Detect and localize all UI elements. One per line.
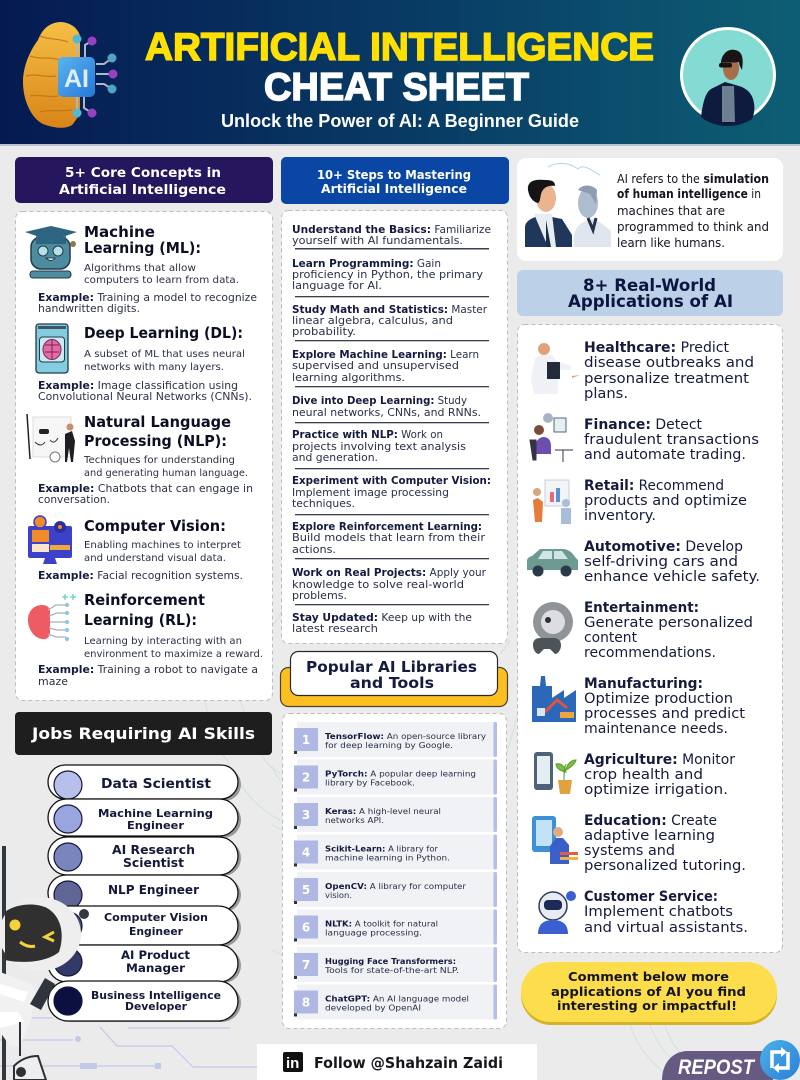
title: CHEAT SHEET	[264, 66, 529, 109]
concept: reinforcement learning: Reinforcement	[84, 591, 206, 609]
library 6	[294, 910, 497, 944]
library 3: 3	[302, 808, 310, 822]
panel: applications heading: Applications of AI	[568, 292, 733, 311]
application: education: personalized tutoring.	[584, 858, 746, 874]
application: manufacturing: processes and predict	[584, 706, 746, 722]
application: finance: fraudulent transactions	[584, 432, 759, 448]
concept: natural language processing: Processing (NLP):	[84, 432, 227, 450]
library 6: language processing.	[325, 928, 422, 938]
step 9: problems.	[292, 590, 347, 602]
step 5	[292, 395, 489, 423]
panel: libraries heading: and Tools	[350, 674, 434, 692]
job: ai product manager: Manager	[126, 961, 185, 975]
panel: applications list	[518, 324, 782, 952]
panel: core concepts heading: 5+ Core Concepts in	[65, 166, 221, 181]
icon: winking robot mascot	[0, 846, 89, 1080]
job: ai research scientist	[48, 837, 241, 876]
step 2: proficiency in Python, the primary	[292, 269, 483, 281]
step 6: Practice with NLP: Work on	[292, 429, 443, 441]
step 6	[292, 429, 489, 469]
panel: AI definition card	[517, 158, 783, 261]
application: retail: Retail: Recommend	[584, 478, 724, 494]
library 2	[294, 760, 497, 794]
icon: student with tablet	[532, 816, 578, 864]
application: education: Education: Create	[584, 813, 717, 829]
title: ARTIFICIAL INTELLIGENCE	[145, 26, 654, 69]
step 3: Study Math and Statistics: Master	[292, 304, 488, 316]
application: education: systems and	[584, 843, 675, 859]
step 1: Understand the Basics: Familiarize	[292, 224, 491, 236]
concept: deep learning: Convolutional Neural Networks (CNNs).	[38, 391, 252, 403]
application: healthcare: Healthcare: Predict	[584, 340, 730, 356]
application: manufacturing	[532, 676, 746, 737]
application: customer service: and virtual assistants.	[584, 920, 748, 936]
icon: linkedin	[283, 1052, 303, 1072]
application: manufacturing: Manufacturing:	[584, 676, 703, 692]
job: ai research scientist: AI Research	[112, 843, 195, 857]
panel: core concepts heading: Artificial Intelligence	[59, 183, 226, 198]
application: retail: inventory.	[584, 508, 656, 524]
library 6: 6	[302, 920, 310, 934]
concept: computer vision: Computer Vision:	[84, 517, 226, 535]
concept: reinforcement learning	[28, 591, 263, 688]
library 3	[294, 797, 497, 832]
step 4: learning algorithms.	[292, 372, 405, 384]
panel: jobs heading: Jobs Requiring AI Skills	[31, 724, 255, 743]
concept: machine learning: Learning (ML):	[84, 239, 201, 257]
step 10	[292, 612, 472, 635]
application: healthcare: personalize treatment	[584, 371, 750, 387]
library 2: PyTorch: A popular deep learning	[325, 768, 476, 778]
library 4	[294, 834, 497, 870]
application: entertainment: Generate personalized	[584, 615, 753, 631]
application: retail	[533, 478, 747, 524]
concept: machine learning: Machine	[84, 223, 155, 241]
library 8: ChatGPT: An AI language model	[325, 994, 469, 1004]
application: entertainment: Entertainment:	[584, 600, 699, 616]
panel: applications heading: 8+ Real-World	[583, 276, 716, 295]
application: finance: and automate trading.	[584, 447, 746, 463]
application: entertainment	[533, 600, 753, 661]
job: data scientist	[48, 765, 241, 801]
icon: factory robot arm	[532, 676, 576, 722]
application: healthcare	[531, 340, 754, 402]
panel: steps heading: 10+ Steps to Mastering	[317, 168, 471, 182]
header banner	[0, 0, 800, 146]
step 2: language for AI.	[292, 280, 382, 292]
concept: computer vision	[28, 516, 243, 582]
panel: libraries list	[282, 714, 506, 1028]
icon: doctor	[531, 343, 580, 394]
library 2: library by Facebook.	[325, 778, 415, 788]
library 3: networks API.	[325, 815, 384, 825]
panel: steps list	[282, 210, 508, 644]
library 1: 1	[302, 733, 310, 747]
application: education	[532, 813, 746, 874]
job: ai product manager: AI Product	[121, 948, 191, 962]
icon: person with NLP bot	[27, 414, 75, 462]
concept: computer vision: Example: Facial recognition systems.	[38, 570, 243, 582]
application: customer service: Implement chatbots	[584, 904, 733, 920]
panel: AI definition card: learn like humans.	[617, 235, 725, 250]
step 10: Stay Updated: Keep up with the	[292, 612, 472, 624]
step 8: Build models that learn from their	[292, 532, 486, 544]
panel: jobs heading	[15, 712, 272, 755]
step 9	[292, 567, 489, 605]
step 3: probability.	[292, 326, 356, 338]
library 1: for deep learning by Google.	[325, 740, 453, 750]
concept: computer vision: and understand visual data.	[84, 553, 226, 564]
step 5: neural networks, CNNs, and RNNs.	[292, 407, 481, 419]
icon: phone with plant	[534, 752, 576, 794]
concept: machine learning: handwritten digits.	[38, 303, 140, 315]
step 1	[292, 224, 491, 250]
step 2	[292, 258, 489, 297]
icon: linkedin: in	[286, 1055, 299, 1072]
step 6: and generation.	[292, 452, 378, 464]
job: ai research scientist: Scientist	[123, 856, 184, 870]
concept: natural language processing: Natural Language	[84, 413, 231, 431]
concept: machine learning: computers to learn from data.	[84, 275, 239, 286]
icon: robot presenting chart	[533, 480, 571, 524]
concept: deep learning: networks with many layers.	[84, 362, 224, 373]
library 4: Scikit-Learn: A library for	[325, 844, 439, 854]
step 8: actions.	[292, 544, 336, 556]
application: finance	[530, 413, 759, 463]
job: machine learning engineer: Engineer	[127, 819, 185, 832]
job: business intelligence developer: Business Intelligence	[91, 990, 221, 1002]
step 7: techniques.	[292, 498, 355, 510]
step 4	[292, 349, 489, 387]
concept: natural language processing: and generating human language.	[84, 468, 248, 479]
job: machine learning engineer: Machine Learning	[98, 807, 213, 820]
step 2: Learn Programming: Gain	[292, 258, 441, 270]
step 8	[292, 521, 489, 559]
application: manufacturing: maintenance needs.	[584, 721, 728, 737]
job: computer vision engineer: Engineer	[129, 925, 184, 938]
panel: core concepts heading	[15, 157, 273, 203]
application: automotive: enhance vehicle safety.	[584, 569, 760, 585]
application: agriculture: optimize irrigation.	[584, 782, 728, 798]
icon: man facing robot	[525, 163, 611, 247]
job: business intelligence developer: Developer	[125, 1001, 188, 1013]
concept: natural language processing: Techniques for understanding	[83, 455, 235, 466]
panel: applications heading	[517, 270, 783, 316]
step 4: Explore Machine Learning: Learn	[292, 349, 479, 361]
library 3: Keras: A high-level neural	[325, 806, 441, 816]
panel: jobs list	[48, 765, 241, 1022]
application: agriculture: crop health and	[584, 767, 703, 783]
concept: deep learning: Example: Image classification using	[38, 380, 238, 392]
concept: reinforcement learning: environment to maximize a reward.	[84, 649, 263, 660]
panel: AI definition card: of human intelligence in	[617, 186, 761, 201]
panel: steps heading	[281, 157, 509, 204]
step 1: yourself with AI fundamentals.	[292, 235, 463, 247]
icon: red brain with nodes	[28, 594, 76, 641]
panel: AI definition card: AI refers to the simulation	[617, 171, 769, 186]
concept: reinforcement learning: Learning by interacting with an	[84, 636, 242, 647]
step 10: latest research	[292, 623, 378, 635]
application: healthcare: disease outbreaks and	[584, 355, 754, 371]
icon: robot with graduation cap	[25, 226, 77, 278]
concept: natural language processing	[27, 413, 253, 506]
concept: deep learning	[36, 324, 252, 403]
job: ai product manager	[48, 945, 241, 983]
application: agriculture: Agriculture: Monitor	[584, 752, 735, 768]
library 6: NLTK: A toolkit for natural	[325, 918, 438, 928]
job: machine learning engineer	[48, 799, 241, 838]
icon: self-driving car	[527, 549, 578, 576]
library 7: 7	[302, 958, 310, 972]
step 7	[292, 475, 491, 515]
panel: core concepts	[16, 212, 272, 700]
concept: reinforcement learning: maze	[38, 676, 68, 688]
follow bar	[257, 1044, 537, 1080]
concept: deep learning: Deep Learning (DL):	[84, 324, 243, 342]
panel: AI definition card: machines that are	[617, 203, 725, 218]
application: customer service	[538, 889, 748, 936]
title	[145, 26, 654, 109]
step 7: Implement image processing	[292, 487, 449, 499]
job: business intelligence developer	[48, 981, 241, 1022]
library 5	[294, 872, 497, 907]
library 8	[294, 984, 497, 1020]
library 8: 8	[302, 996, 310, 1010]
application: automotive: Automotive: Develop	[584, 539, 743, 555]
application: retail: products and optimize	[584, 493, 747, 509]
icon: support bot with headset	[538, 891, 576, 934]
concept: reinforcement learning: Learning (RL):	[84, 611, 197, 629]
icon: AI brain with circuit chip	[23, 22, 118, 128]
application: agriculture	[534, 752, 735, 798]
concept: reinforcement learning: Example: Training a robot to navigate a	[38, 664, 258, 676]
icon: robot head with gamepad	[533, 602, 573, 654]
icon: analyst at desk	[530, 413, 573, 462]
application: manufacturing: Optimize production	[584, 691, 733, 707]
callout: comment prompt: interesting or impactful!	[557, 998, 737, 1013]
panel: AI definition card: programmed to think and	[617, 219, 769, 234]
icon: author portrait	[680, 27, 776, 126]
panel: steps heading: Artificial Intelligence	[321, 182, 467, 196]
application: healthcare: plans.	[584, 386, 628, 402]
application: customer service: Customer Service:	[584, 889, 718, 905]
concept: machine learning: Algorithms that allow	[84, 263, 196, 274]
callout: comment prompt: Comment below more	[568, 969, 729, 984]
library 5: OpenCV: A library for computer	[325, 881, 467, 891]
application: automotive	[527, 539, 760, 585]
application: entertainment: content	[584, 630, 637, 646]
step 5: Dive into Deep Learning: Study	[292, 395, 467, 407]
library 1	[294, 722, 497, 757]
repost badge	[662, 1040, 800, 1080]
callout: comment prompt: applications of AI you find	[551, 984, 746, 999]
library 7	[294, 947, 497, 982]
library 5: vision.	[325, 890, 352, 900]
step 3: linear algebra, calculus, and	[292, 315, 453, 327]
concept: natural language processing: conversation.	[38, 494, 110, 506]
application: education: adaptive learning	[584, 828, 715, 844]
follow bar: Follow @Shahzain Zaidi	[314, 1054, 503, 1072]
library 7: Tools for state-of-the-art NLP.	[324, 965, 459, 975]
library 4: machine learning in Python.	[325, 852, 450, 862]
library 5: 5	[302, 883, 310, 897]
job: data scientist: Data Scientist	[101, 777, 211, 792]
concept: computer vision: Enabling machines to interpret	[84, 540, 241, 551]
concept: machine learning: Example: Training a model to recognize	[38, 292, 257, 304]
concept: natural language processing: Example: Chatbots that can engage in	[38, 483, 253, 495]
callout: comment prompt	[521, 962, 777, 1025]
library 8: developed by OpenAI	[325, 1002, 421, 1012]
library 2: 2	[302, 770, 310, 784]
step 9: Work on Real Projects: Apply your	[292, 567, 487, 579]
job: computer vision engineer	[48, 906, 241, 947]
library 7: Hugging Face Transformers:	[325, 956, 456, 966]
application: entertainment: recommendations.	[584, 645, 716, 661]
step 7: Experiment with Computer Vision:	[292, 475, 491, 487]
subtitle: Unlock the Power of AI: A Beginner Guide	[221, 111, 579, 131]
concept: deep learning: A subset of ML that uses neural	[84, 349, 245, 360]
job: nlp engineer: NLP Engineer	[108, 883, 199, 897]
step 8: Explore Reinforcement Learning:	[292, 521, 482, 533]
repost badge: REPOST	[678, 1056, 756, 1079]
icon: tablet with brain	[36, 324, 68, 373]
step 6: projects involving text analysis	[292, 441, 466, 453]
library 4: 4	[302, 846, 310, 860]
step 9: knowledge to solve real-world	[292, 579, 464, 591]
panel: libraries heading	[280, 652, 508, 706]
concept: machine learning	[25, 223, 257, 315]
step 3	[292, 304, 489, 341]
step 4: supervised and unsupervised	[292, 360, 459, 372]
application: finance: Finance: Detect	[584, 417, 703, 433]
library 1: TensorFlow: An open-source library	[325, 731, 486, 741]
icon: monitor with eye	[28, 516, 72, 564]
job: nlp engineer	[48, 875, 241, 912]
icon: AI brain with circuit chip: AI	[64, 65, 89, 93]
panel: libraries heading: Popular AI Libraries	[306, 658, 477, 676]
job: computer vision engineer: Computer Vision	[104, 911, 208, 924]
application: automotive: self-driving cars and	[584, 554, 738, 570]
